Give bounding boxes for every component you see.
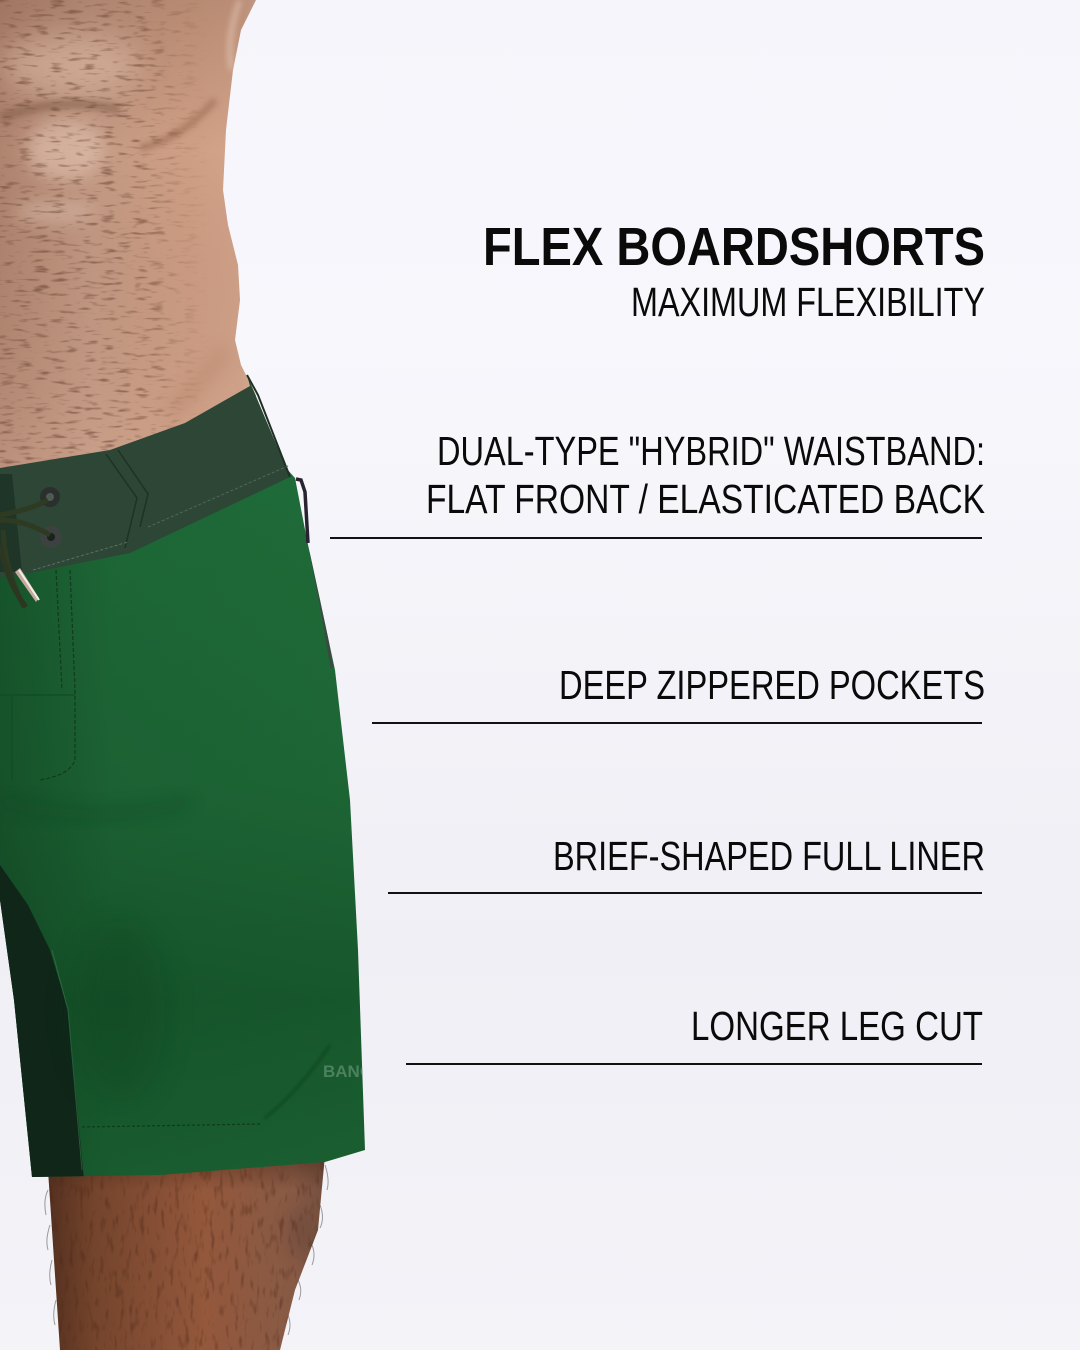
waistband <box>0 375 290 577</box>
feature: pockets: DEEP ZIPPERED POCKETS <box>559 662 985 708</box>
body hair texture <box>0 0 198 466</box>
leg <box>48 1162 324 1350</box>
logo on shorts: BANG <box>323 1062 373 1081</box>
zipper pull at side <box>296 479 308 543</box>
shorts body <box>0 460 370 1180</box>
photo: model torso and green boardshorts <box>0 0 373 1350</box>
dark side panel <box>0 865 84 1180</box>
feature: leg cut: LONGER LEG CUT <box>691 1003 983 1049</box>
feature: waistband <box>330 428 985 539</box>
subtitle: MAXIMUM FLEXIBILITY <box>631 279 985 325</box>
hem stitching <box>82 1124 260 1127</box>
title: FLEX BOARDSHORTS <box>483 217 985 277</box>
fly stitching <box>40 570 75 780</box>
side seam shadow <box>311 552 332 668</box>
torso <box>0 0 260 500</box>
leg hair <box>45 1165 328 1335</box>
drawstring and eyelets <box>0 487 62 607</box>
